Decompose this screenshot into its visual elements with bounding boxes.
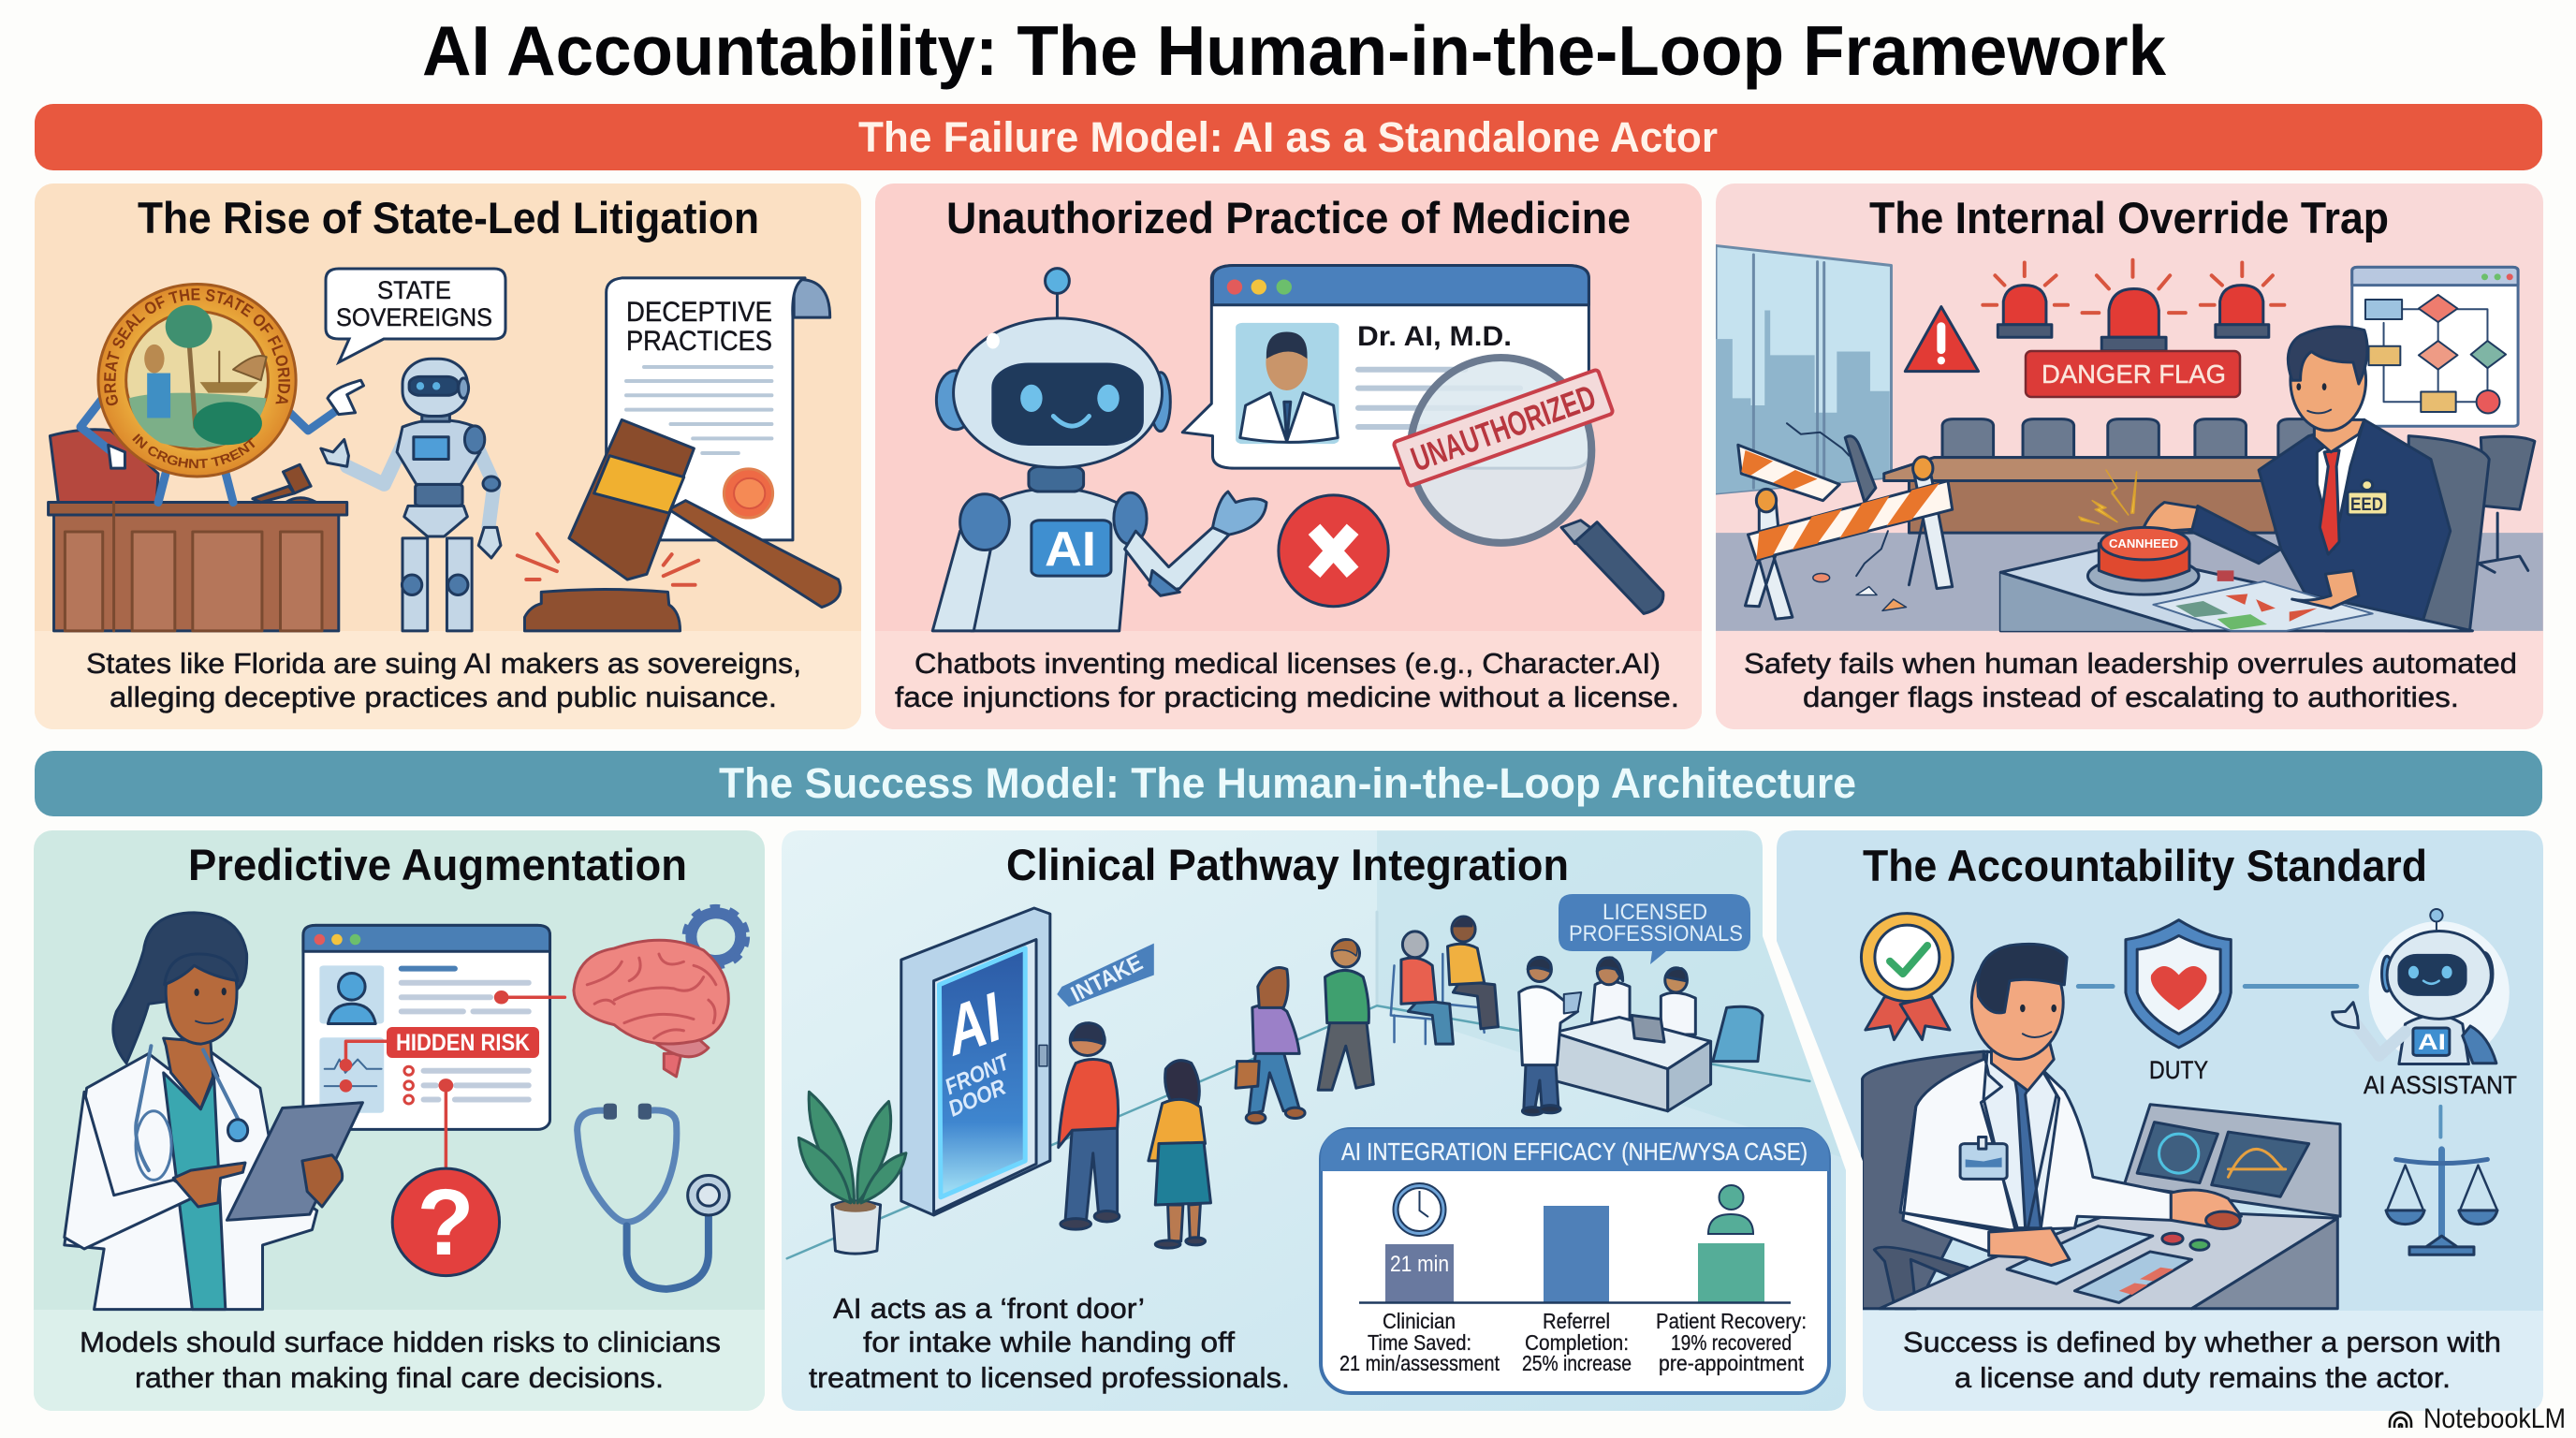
icon: broken barricades [1738, 423, 1953, 619]
panel: state-led litigation [35, 183, 861, 729]
icon: alarm lights [1983, 260, 2284, 351]
label: intake: INTAKE [1067, 950, 1147, 1007]
caption: accountability standard: Success is defined by whether a person with [1903, 1326, 2501, 1358]
stamp: unauthorized: UNAUTHORIZED [1406, 377, 1601, 478]
panel: internal override trap [1716, 183, 2543, 729]
bar: clinician time saved [1385, 1244, 1454, 1302]
icon: magnifying glass [1411, 358, 1663, 613]
heading: accountability standard: The Accountability Standard [1863, 841, 2427, 890]
label: licensed professionals [1559, 894, 1750, 964]
illustration: boardroom override [1716, 245, 2543, 631]
caption: predictive augmentation: Models should surface hidden risks to clinicians [80, 1326, 721, 1358]
icon: warning triangle [1905, 307, 1979, 372]
caption: state-led litigation: alleging deceptive practices and public nuisance. [110, 681, 777, 713]
label: danger flag: DANGER FLAG [2042, 360, 2226, 389]
labels: referral completion [1522, 1309, 1632, 1375]
section banner: success model: The Success Model: The Human-in-the-Loop Architecture [719, 759, 1856, 807]
bar: clinician time saved: 21 min [1390, 1252, 1449, 1277]
chest label: AI [1045, 522, 1096, 577]
speech bubble: state sovereigns: STATE [377, 276, 451, 304]
people [1065, 1124, 1118, 1222]
section banner: success model [35, 751, 2542, 816]
speech bubble: state sovereigns: SOVEREIGNS [336, 303, 492, 331]
icon: robot standing [321, 359, 501, 631]
control desk with override button [2000, 470, 2472, 631]
panel: unauthorized practice [875, 183, 1702, 729]
label: AI front door: FRONT [942, 1049, 1015, 1100]
button label: CANNHEED [2109, 537, 2178, 550]
icon: question mark: ? [417, 1170, 475, 1275]
panel: accountability standard [1777, 830, 2543, 1411]
window: fake credential: Dr. AI, M.D. [1357, 321, 1512, 352]
label: hidden risk: HIDDEN RISK [396, 1030, 530, 1056]
icon: AI assistant robot: AI [2418, 1030, 2446, 1055]
document: deceptive practices [607, 278, 830, 540]
caption: unauthorized practice [895, 647, 1679, 713]
labels: clinician time saved: Clinician [1383, 1309, 1456, 1333]
caption: accountability standard: a license and duty remains the actor. [1954, 1361, 2451, 1394]
caption: predictive augmentation [80, 1326, 721, 1394]
labels: clinician time saved [1339, 1309, 1500, 1375]
heading: override trap: The Internal Override Trap [1869, 193, 2389, 242]
caption: unauthorized practice: face injunctions for practicing medicine without a license. [895, 681, 1679, 713]
caption: clinical pathway [809, 1292, 1290, 1394]
caption: predictive augmentation: rather than making final care decisions. [135, 1361, 664, 1394]
icon: red x [1279, 495, 1388, 607]
icon: gavel [518, 419, 841, 631]
title: AI Accountability: The Human-in-the-Loop Framework [422, 11, 2166, 90]
icon: scales of justice [2386, 1107, 2497, 1255]
panel: predictive augmentation [34, 830, 765, 1411]
label: AI front door: AI [938, 978, 1010, 1071]
heading: predictive augmentation: Predictive Augmentation [188, 840, 687, 889]
caption: clinical pathway: AI acts as a ‘front door’ [833, 1292, 1145, 1325]
labels: patient recovery: Patient Recovery: [1656, 1309, 1807, 1333]
bar: patient recovery [1698, 1243, 1764, 1302]
figure: clinician with tablet [65, 913, 317, 1310]
icon: duty shield [2078, 920, 2357, 1084]
icon: duty shield: DUTY [2149, 1056, 2208, 1084]
heading: state-led litigation: The Rise of State-Led Litigation [138, 193, 759, 242]
heading: unauthorized practice: Unauthorized Practice of Medicine [946, 193, 1631, 242]
illustration: patient journey [787, 830, 1876, 1258]
icon: AI assistant robot: AI ASSISTANT [2364, 1071, 2517, 1099]
labels: referral completion: Completion: [1525, 1330, 1629, 1355]
section banner: failure model: The Failure Model: AI as a Standalone Actor [858, 113, 1718, 161]
label: danger flag [2026, 351, 2240, 397]
caption: state-led litigation [86, 647, 801, 713]
illustration: chatbot with fake credential [932, 269, 1266, 631]
icon: person [1708, 1185, 1753, 1234]
labels: clinician time saved: Time Saved: [1368, 1330, 1471, 1355]
desk staff [1591, 981, 1630, 1023]
caption: state-led litigation: States like Florida are suing AI makers as sovereigns, [86, 647, 801, 680]
caption: override trap: danger flags instead of escalating to authorities. [1803, 681, 2459, 713]
icon: brain with gear [574, 908, 746, 1077]
caption: override trap [1744, 647, 2517, 713]
label: licensed professionals: LICENSED [1603, 900, 1707, 925]
icon: question mark [392, 1168, 500, 1276]
labels: patient recovery: 19% recovered [1671, 1330, 1792, 1355]
board: flowchart [2352, 267, 2518, 426]
blue chair [1713, 1006, 1763, 1062]
icon: florida seal lettering: GREAT SEAL OF THE STATE OF FLORIDA [104, 288, 290, 406]
figure: executive pressing button [2140, 327, 2451, 631]
icon: license rosette [1861, 914, 1953, 1040]
caption: accountability standard [1903, 1326, 2501, 1394]
icon: tablet [227, 1103, 362, 1220]
labels: patient recovery [1656, 1309, 1807, 1375]
label: licensed professionals: PROFESSIONALS [1569, 921, 1743, 946]
labels: referral completion: 25% increase [1522, 1351, 1632, 1375]
labels: clinician time saved: 21 min/assessment [1339, 1351, 1500, 1375]
icon: florida seal lettering: IN CRGHNT TRENT [132, 433, 255, 468]
caption: clinical pathway: for intake while handing off [863, 1326, 1235, 1358]
chart title: AI INTEGRATION EFFICACY (NHE/WYSA CASE) [1341, 1137, 1808, 1166]
document: deceptive practices: PRACTICES [626, 326, 772, 357]
speech bubble: state sovereigns [326, 269, 505, 362]
caption: unauthorized practice: Chatbots inventing medical licenses (e.g., Character.AI) [915, 647, 1661, 680]
icon: AI assistant robot [2333, 909, 2517, 1099]
caption: clinical pathway: treatment to licensed professionals. [809, 1361, 1290, 1394]
illustration: court scene [49, 284, 363, 631]
icon: clock [1393, 1183, 1445, 1236]
chart card: AI integration efficacy [1321, 1129, 1829, 1393]
icon: florida seal lettering [104, 288, 290, 468]
label: AI front door: DOOR [944, 1075, 1010, 1122]
standing doctor [1524, 1064, 1559, 1109]
icon: badge text: EED [2350, 495, 2383, 515]
labels: referral completion: Referrel [1543, 1309, 1610, 1333]
stamp: unauthorized [1393, 369, 1614, 487]
seated patients [1391, 954, 1485, 1044]
window: fake credential [1182, 266, 1588, 468]
icon: stethoscope [578, 1104, 729, 1289]
caption: override trap: Safety fails when human leadership overrules automated [1744, 647, 2517, 680]
section banner: failure model [35, 104, 2542, 170]
document: deceptive practices: DECEPTIVE [626, 297, 772, 328]
bar: referral completion [1544, 1206, 1609, 1302]
labels: patient recovery: pre-appointment [1659, 1351, 1805, 1375]
panel: clinical pathway integration [782, 830, 1876, 1411]
heading: clinical pathway: Clinical Pathway Integration [1006, 840, 1569, 889]
label: AI front door [945, 992, 1007, 1117]
window: patient dashboard [303, 925, 564, 1167]
illustration: clinician at console [1863, 944, 2340, 1309]
